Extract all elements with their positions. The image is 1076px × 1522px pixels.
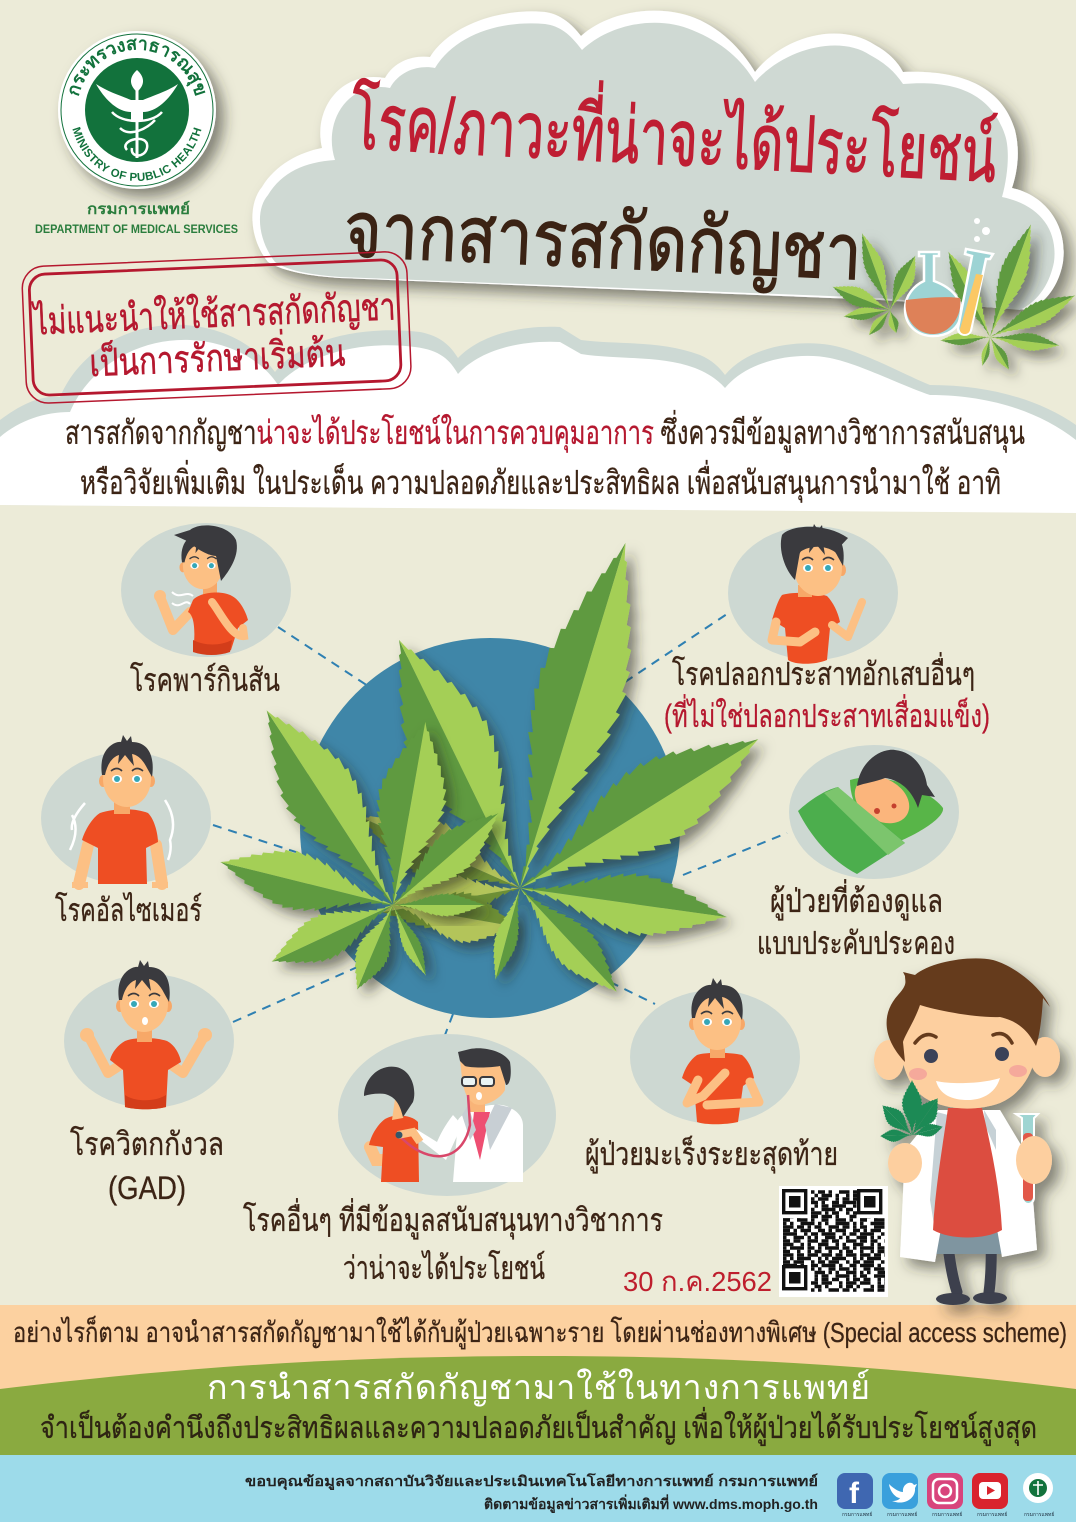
circle background [338, 1034, 556, 1196]
label line 1: โรคอื่นๆ ที่มีข้อมูลสนับสนุนทางวิชาการ [243, 1198, 663, 1240]
left leaf [213, 690, 513, 996]
label line 1: ผู้ป่วยที่ต้องดูแล [770, 879, 943, 921]
caduceus emblem [96, 70, 178, 158]
label: terminal cancer: ผู้ป่วยมะเร็งระยะสุดท้าย [585, 1135, 838, 1174]
green headline: การนำสารสกัดกัญชามาใช้ในทางการแพทย์ [207, 1368, 870, 1407]
head [874, 958, 1060, 1109]
logo ring text Thai: กระทรวงสาธารณสุข [70, 38, 206, 96]
connector lines [213, 612, 787, 1048]
icon captions: กรมการแพทย์ [1024, 1511, 1054, 1518]
stamp text line 1: ไม่แนะนำให้ใช้สารสกัดกัญชา [31, 285, 396, 344]
panel: Alzheimer [41, 735, 211, 885]
band: blue footer [0, 1455, 1076, 1522]
QR code [779, 1186, 888, 1297]
label: GAD [70, 1126, 224, 1206]
red shirt [933, 1108, 1002, 1238]
label: neuropathic [664, 652, 990, 734]
label line 2: ว่าน่าจะได้ประโยชน์ [343, 1250, 545, 1286]
icon captions [842, 1511, 1054, 1518]
logo caption [35, 200, 238, 236]
label line 1: โรควิตกกังวล [70, 1126, 224, 1162]
label line 2: แบบประคับประคอง [757, 925, 955, 961]
date: 30 ก.ค.2562 [623, 1266, 772, 1297]
band: orange notice [0, 1305, 1076, 1456]
stamp text line 2: เป็นการรักษาเริ่มต้น [88, 327, 346, 385]
blanket [798, 787, 905, 874]
label: palliative [757, 879, 955, 961]
title cloud [252, 11, 1064, 310]
social icons [837, 1473, 1054, 1518]
small leaf right [938, 220, 1076, 373]
circle background [41, 752, 211, 884]
left hand with leaf [876, 1080, 946, 1183]
panel: Parkinson [121, 523, 291, 657]
label: Alzheimer: โรคอัลไซเมอร์ [55, 892, 202, 928]
logo ring text English: MINISTRY OF PUBLIC HEALTH [72, 126, 202, 181]
circle background [121, 523, 291, 657]
panel: GAD [64, 960, 234, 1109]
doctor character [874, 958, 1060, 1305]
label: Parkinson: โรคพาร์กินสัน [130, 662, 280, 698]
credit line: ขอบคุณข้อมูลจากสถาบันวิจัยและประเมินเทคโนโลยีทางการแพทย์ กรมการแพทย์ [245, 1472, 818, 1490]
icon: twitter [882, 1473, 918, 1509]
website line: ติดตามข้อมูลข่าวสารเพิ่มเติมที่ www.dms.moph.go.th [484, 1494, 818, 1513]
icon captions: กรมการแพทย์ [932, 1511, 962, 1518]
patient figure [80, 960, 212, 1109]
right leaf [360, 530, 781, 1007]
central blue circle [300, 638, 680, 1018]
panel: neuropathic [728, 524, 898, 664]
department Thai: กรมการแพทย์ [87, 200, 190, 218]
stamp: warning [21, 251, 412, 404]
circle background [64, 974, 234, 1108]
icon captions: กรมการแพทย์ [887, 1511, 917, 1518]
patient figure [682, 978, 759, 1124]
icon: instagram [927, 1473, 963, 1509]
icon: facebook: f [849, 1477, 860, 1510]
label line 2: (GAD) [108, 1170, 186, 1206]
logo: Ministry of Public Health [56, 30, 234, 206]
department English: DEPARTMENT OF MEDICAL SERVICES [35, 224, 238, 236]
title line 2: จากสารสกัดกัญชา [342, 185, 864, 297]
icon: ministry logo [1023, 1473, 1053, 1503]
patient back [364, 1067, 419, 1182]
lab coat [900, 1110, 1037, 1262]
label: other conditions [243, 1198, 663, 1286]
legs [936, 1235, 1007, 1305]
back leaflets [348, 790, 532, 952]
panel: palliative [789, 745, 959, 879]
icon captions: กรมการแพทย์ [842, 1511, 872, 1518]
subtitle cloud [0, 325, 1076, 513]
panel: terminal cancer [630, 978, 800, 1124]
band: green hill [0, 1356, 1076, 1456]
head [846, 750, 935, 833]
icon: flask and cannabis leaves [829, 218, 1076, 373]
circle background [728, 526, 898, 660]
coat lining [930, 1110, 996, 1225]
patient figure [154, 525, 248, 655]
patient figure [70, 735, 173, 885]
icon: youtube [972, 1473, 1008, 1509]
panel: doctor examining [338, 1034, 556, 1196]
icon: facebook [837, 1473, 873, 1510]
test tube [958, 249, 993, 335]
bubbles [974, 218, 990, 242]
flask [905, 252, 961, 336]
footer text [245, 1472, 818, 1513]
cannabis leaves [213, 530, 781, 1007]
pillow [850, 777, 943, 842]
circle background [789, 745, 959, 879]
label line 1: โรคปลอกประสาทอักเสบอื่นๆ [672, 652, 975, 692]
patient figure [772, 524, 862, 664]
test tube and right hand [1016, 1114, 1052, 1204]
icon captions: กรมการแพทย์ [977, 1511, 1007, 1518]
small leaf left [829, 230, 924, 339]
circle background [630, 990, 800, 1124]
stamp frame [21, 251, 412, 404]
shorts [935, 1225, 1003, 1254]
doctor [396, 1048, 523, 1182]
